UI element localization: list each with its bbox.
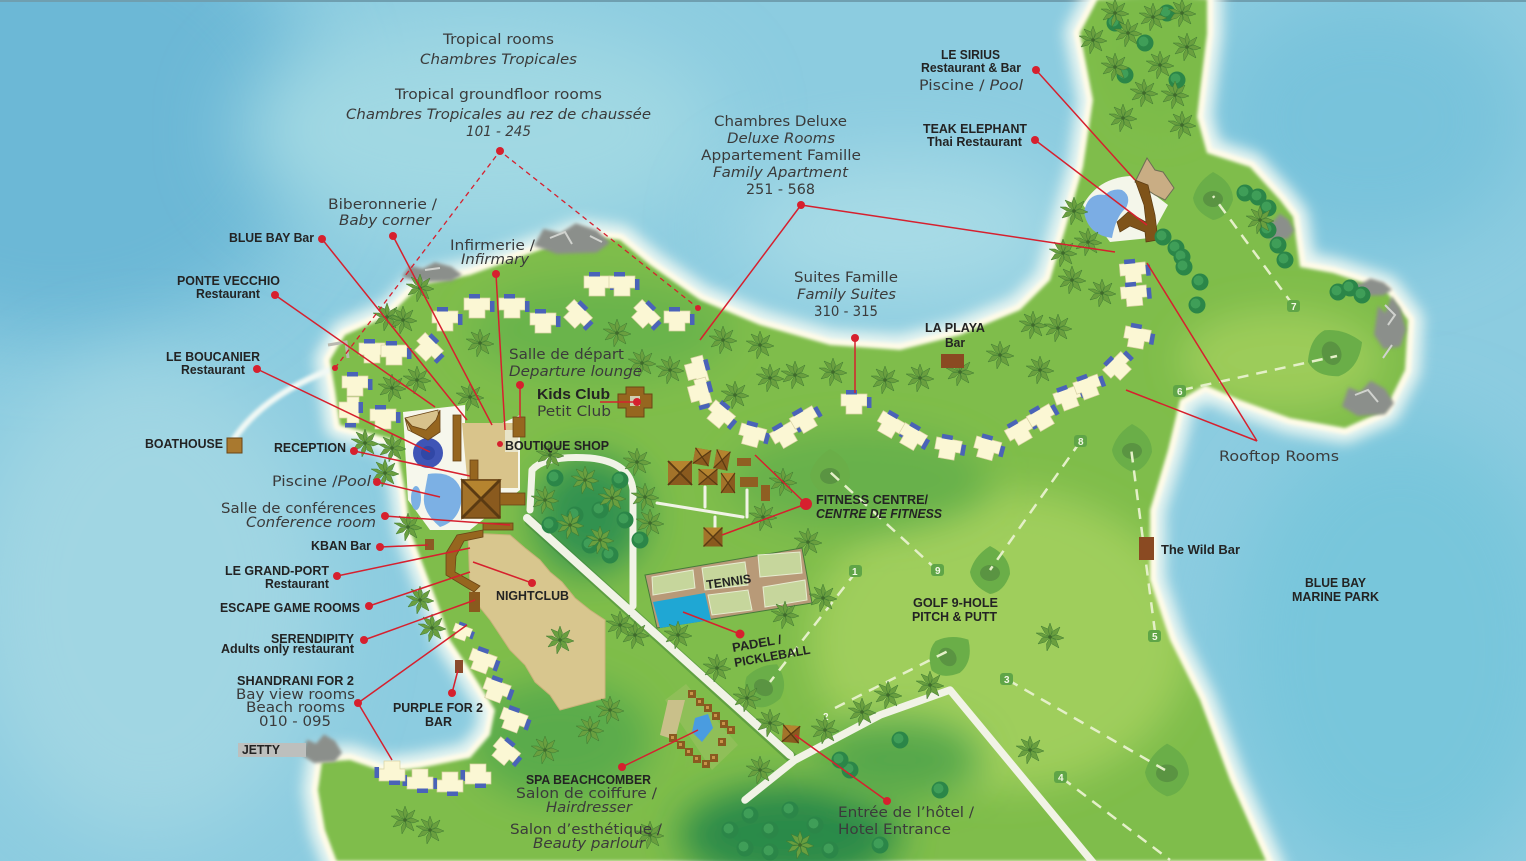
label: serendipity: SERENDIPITY: [271, 632, 355, 646]
connector: escape game rooms: [365, 572, 470, 610]
label: shandrani for 2: [236, 674, 355, 730]
label: family suites: Family Suites: [797, 287, 896, 303]
label: blue bay marine park: [1292, 576, 1379, 604]
golf hole numbers: 1: [852, 567, 858, 578]
label: padel pickleball: PADEL /: [731, 632, 783, 655]
golf hole numbers: 8: [1078, 437, 1084, 448]
label: infirmerie: Infirmary: [461, 252, 529, 268]
label: kban bar: KBAN Bar: [311, 539, 371, 553]
terrace: [403, 405, 520, 530]
label: tropical groundfloor rooms: [346, 87, 651, 140]
golf hole numbers: 3: [1004, 675, 1010, 686]
main pool: [424, 473, 462, 527]
label: shandrani for 2: SHANDRANI FOR 2: [237, 674, 354, 688]
label: teak elephant: TEAK ELEPHANT: [923, 122, 1027, 136]
golf fairway dashes: [770, 196, 1337, 860]
bar marker: la playa: [941, 354, 964, 368]
kban bar: [425, 539, 434, 550]
connector: shandrani: [354, 625, 467, 760]
label: le boucanier: [166, 350, 260, 377]
dot: boutique shop: [497, 441, 503, 447]
label: hotel entrance: Hotel Entrance: [838, 822, 951, 838]
label: the wild bar: The Wild Bar: [1161, 543, 1240, 557]
label: deluxe rooms: [701, 114, 861, 198]
label: spa beachcomber: [510, 773, 662, 852]
connector: kban bar: [376, 543, 428, 551]
hotel entrance hut: [782, 725, 800, 743]
label: le sirius: [919, 48, 1023, 94]
connector: departure lounge: [516, 381, 524, 418]
thatched roofs: [405, 410, 525, 592]
golf hole numbers: 4: [1058, 773, 1064, 784]
le sirius and teak elephant complex: [1083, 158, 1174, 242]
label: infirmerie: [450, 238, 535, 268]
label: le sirius: Piscine / Pool: [919, 78, 1023, 94]
label: escape game rooms: ESCAPE GAME ROOMS: [220, 601, 360, 615]
connector: spa: [618, 730, 698, 771]
label: la playa: LA PLAYA: [925, 321, 985, 335]
main building: [462, 423, 518, 488]
label: deluxe rooms: Deluxe Rooms: [727, 131, 835, 147]
label: le boucanier: LE BOUCANIER: [166, 350, 260, 364]
tennis and padel courts: [645, 548, 812, 628]
label: ponte vecchio: Restaurant: [196, 287, 261, 301]
label: kids club: Kids Club: [537, 386, 610, 403]
label: purple for 2: PURPLE FOR 2: [393, 701, 483, 715]
label: tropical rooms: Tropical rooms: [442, 32, 554, 48]
label: tropical groundfloor rooms: Chambres Tropicales au rez de chaussée: [346, 107, 651, 123]
connector: blue bay bar: [318, 235, 467, 420]
label: boutique shop: BOUTIQUE SHOP: [505, 439, 609, 453]
label: golf: PITCH & PUTT: [912, 610, 997, 624]
label: ponte vecchio: [177, 274, 280, 301]
label: infirmerie: Infirmerie /: [450, 238, 535, 254]
label: spa beachcomber: Salon d’esthétique /: [510, 822, 662, 838]
golf course: [736, 172, 1370, 860]
small pool: [411, 486, 421, 510]
connector: le grand-port: [333, 548, 470, 580]
label: shandrani for 2: Bay view rooms: [236, 687, 355, 703]
connector: padel: [683, 612, 744, 638]
label: family suites: 310 - 315: [814, 304, 878, 320]
roads: [527, 458, 1095, 861]
label: tropical groundfloor rooms: Tropical groundfloor rooms: [394, 87, 602, 103]
label: blue bay bar: BLUE BAY Bar: [229, 231, 314, 245]
connector: deluxe rooms: [700, 201, 1115, 340]
label: fitness centre: [816, 493, 943, 521]
label: departure lounge: Departure lounge: [509, 364, 642, 380]
label: tropical rooms: [420, 32, 577, 68]
label: deluxe rooms: 251 - 568: [746, 182, 815, 198]
connector: rooftop rooms: [1126, 263, 1257, 441]
label: nightclub: NIGHTCLUB: [496, 589, 569, 603]
connector: le boucanier: [253, 365, 430, 452]
label: hotel entrance: Entrée de l’hôtel /: [838, 805, 974, 821]
rocks: [302, 214, 1406, 763]
label: kids club: Petit Club: [537, 404, 611, 420]
golf greens: [736, 172, 1370, 796]
kids club: [618, 387, 652, 417]
label: biberonnerie: Biberonnerie /: [328, 197, 437, 213]
connector: teak elephant: [1031, 136, 1147, 225]
golf hole numbers: 2: [823, 712, 829, 723]
label: tennis: TENNIS: [705, 572, 752, 592]
label: deluxe rooms: Family Apartment: [713, 165, 849, 181]
label: jetty: JETTY: [242, 743, 281, 757]
label: golf: GOLF 9-HOLE: [913, 596, 998, 610]
label: conference room: Salle de conférences: [221, 501, 376, 517]
label: serendipity: [221, 632, 355, 656]
connector: reception: [350, 447, 470, 476]
label: la playa: [925, 321, 985, 350]
palm trees: [351, 0, 1370, 860]
label: spa beachcomber: Salon de coiffure /: [516, 786, 657, 802]
villa rooms: [339, 258, 1156, 796]
golf hole numbers: 7: [1291, 302, 1297, 313]
connector: le sirius: [1032, 66, 1135, 180]
connector: serendipity: [360, 600, 475, 644]
label: le grand-port: [225, 564, 330, 591]
fitness centre buildings: [668, 448, 770, 546]
label: ponte vecchio: PONTE VECCHIO: [177, 274, 280, 288]
label: spa beachcomber: Hairdresser: [546, 800, 633, 816]
label: padel pickleball: PICKLEBALL: [733, 643, 812, 670]
connector: conference room: [381, 512, 510, 525]
label: piscine: Piscine / Pool: [272, 474, 371, 490]
label: tropical groundfloor rooms: 101 - 245: [466, 124, 531, 140]
label: deluxe rooms: Chambres Deluxe: [714, 114, 847, 130]
label: conference room: Conference room: [246, 515, 376, 531]
round pool: [413, 438, 443, 468]
connector: hotel entrance: [795, 735, 891, 805]
label: le grand-port: Restaurant: [265, 577, 330, 591]
label: fitness centre: FITNESS CENTRE/: [816, 493, 929, 507]
connector: piscine: [373, 478, 440, 497]
north jetty: [328, 342, 348, 358]
label: spa beachcomber: SPA BEACHCOMBER: [526, 773, 651, 787]
connector: purple for 2: [448, 670, 458, 697]
label: family suites: Suites Famille: [794, 270, 898, 286]
connector: tropical rooms dashed: [332, 147, 701, 371]
label: rooftop rooms: Rooftop Rooms: [1219, 449, 1339, 465]
label: family suites: [794, 270, 898, 320]
label: departure lounge: Salle de départ: [509, 347, 624, 363]
label: blue bay marine park: BLUE BAY: [1305, 576, 1367, 590]
label: shandrani for 2: 010 - 095: [259, 714, 331, 730]
label: le grand-port: LE GRAND-PORT: [225, 564, 329, 578]
land: [316, 0, 1410, 861]
purple bar: [455, 660, 463, 673]
label: le sirius: Restaurant & Bar: [921, 61, 1021, 75]
label: purple for 2: [393, 701, 483, 729]
connector: ponte vecchio: [271, 291, 435, 407]
boutique terrace: [505, 430, 518, 452]
label: purple for 2: BAR: [425, 715, 452, 729]
label: la playa: Bar: [945, 336, 965, 350]
label: serendipity: Adults only restaurant: [221, 642, 355, 656]
label: reception: RECEPTION: [274, 441, 346, 455]
label: fitness centre: CENTRE DE FITNESS: [816, 507, 943, 521]
label: biberonnerie: Baby corner: [339, 213, 432, 229]
spa complex: [660, 684, 738, 770]
serendipity hut: [469, 592, 480, 612]
label: teak elephant: [923, 122, 1027, 149]
label: biberonnerie: [328, 197, 437, 229]
label: hotel entrance: [838, 805, 974, 838]
label: le boucanier: Restaurant: [181, 363, 246, 377]
golf hole numbers: 9: [935, 566, 941, 577]
central hotel complex: [227, 342, 652, 757]
golf hole numbers: 5: [1152, 632, 1158, 643]
label: conference room: [221, 501, 376, 531]
golf hole numbers: 6: [1177, 387, 1183, 398]
label: deluxe rooms: Appartement Famille: [701, 148, 861, 164]
padel court: [653, 593, 711, 628]
label: tropical rooms: Chambres Tropicales: [420, 52, 577, 68]
jetty: [238, 743, 306, 757]
kids club courtyard: [630, 396, 640, 406]
connector: family suites: [851, 334, 859, 393]
boat house: [227, 438, 242, 453]
label: kids club: [537, 386, 611, 420]
beach outline: [232, 0, 1408, 861]
connector: biberonnerie: [389, 232, 492, 425]
label: shandrani for 2: Beach rooms: [246, 700, 345, 716]
label: boathouse: BOATHOUSE: [145, 437, 223, 451]
label: departure lounge: [509, 347, 642, 380]
connector: fitness centre: [722, 455, 812, 535]
label: le sirius: LE SIRIUS: [941, 48, 1000, 62]
label: blue bay marine park: MARINE PARK: [1292, 590, 1379, 604]
connector: infirmerie: [492, 270, 505, 430]
nightclub roof: [468, 533, 605, 710]
label: golf: [912, 596, 998, 624]
label: spa beachcomber: Beauty parlour: [533, 836, 646, 852]
bar marker: the wild bar: [1139, 537, 1154, 560]
connector: nightclub: [473, 562, 536, 587]
label: teak elephant: Thai Restaurant: [927, 135, 1023, 149]
golf hole numbers: [823, 300, 1300, 784]
connector: kids club: [600, 398, 641, 406]
